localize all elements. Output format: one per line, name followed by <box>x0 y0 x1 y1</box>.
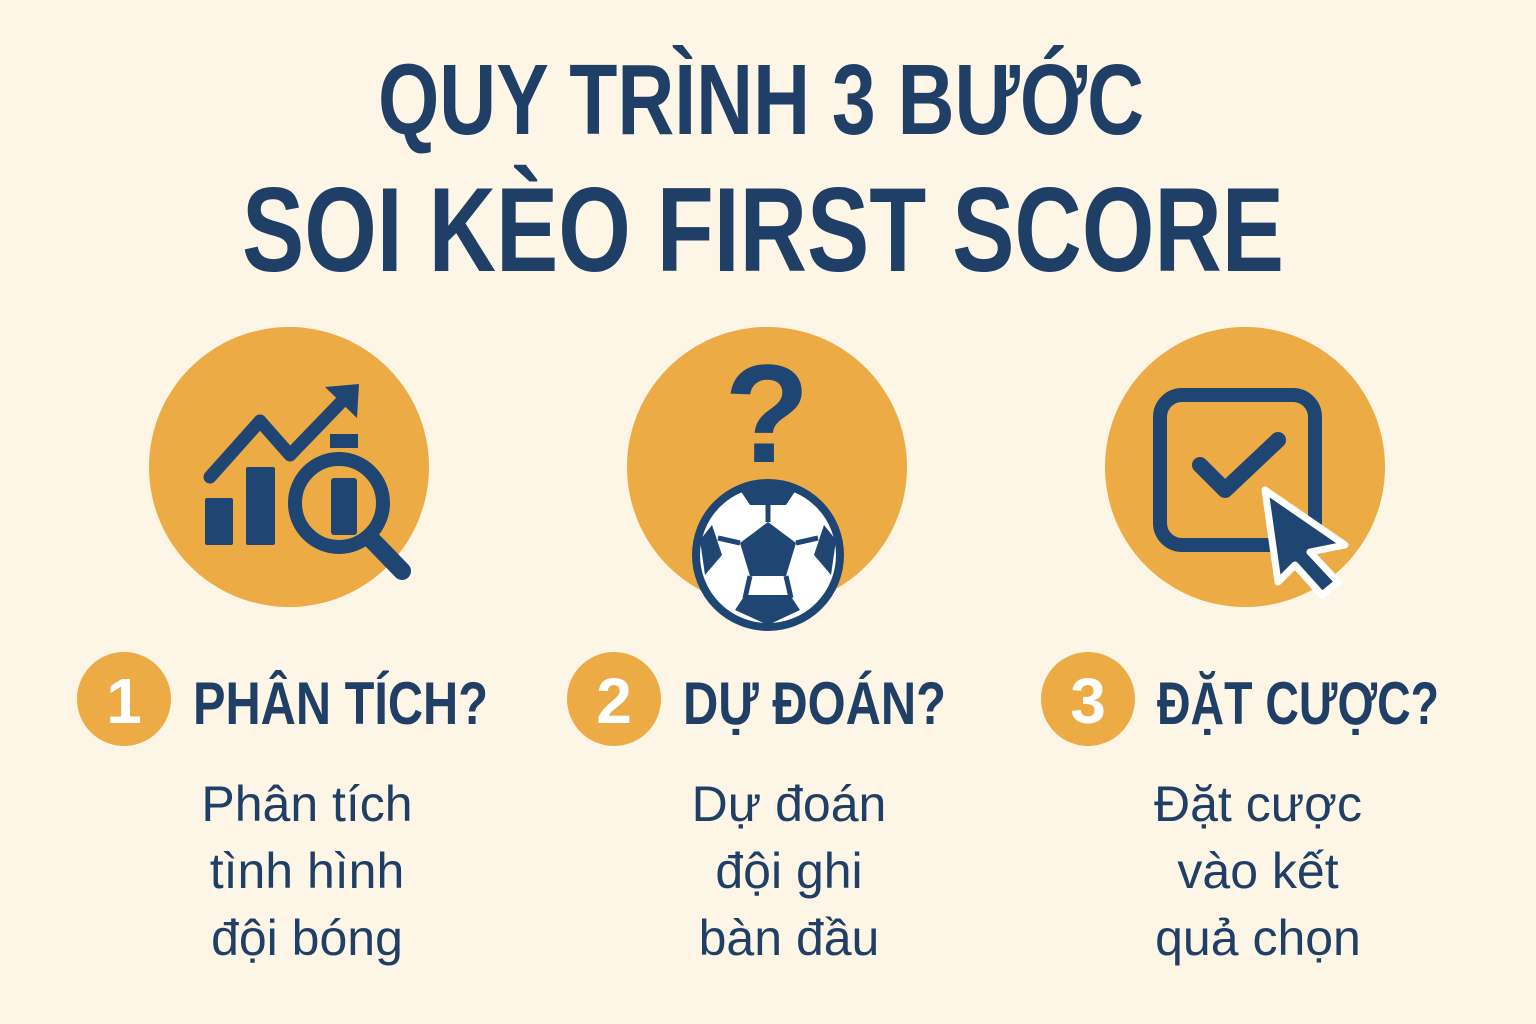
step 1 heading: PHÂN TÍCH? <box>193 670 488 737</box>
step 2 text: bàn đầu <box>699 910 879 966</box>
step 3 text: vào kết <box>1177 843 1339 899</box>
step 3 text: quả chọn <box>1155 910 1361 966</box>
step 3 text <box>1154 776 1362 966</box>
step 3 text: Đặt cược <box>1154 776 1362 832</box>
step 1 text: tình hình <box>210 843 404 899</box>
icon: analysis chart <box>149 327 429 607</box>
step 1 heading <box>77 652 488 746</box>
step 3 heading: ĐẶT CƯỢC? <box>1157 670 1439 737</box>
icon: checkbox and cursor <box>1105 327 1385 607</box>
step 2 text: Dự đoán <box>692 776 886 832</box>
step 2 text: đội ghi <box>715 843 863 899</box>
step 2 text <box>692 776 886 966</box>
step 1 heading: 1 <box>106 665 142 737</box>
step 2 heading: 2 <box>596 665 632 737</box>
step 1 text: đội bóng <box>211 910 403 966</box>
step 1 text <box>201 776 413 966</box>
step 1 text: Phân tích <box>201 776 413 832</box>
title <box>242 44 1284 297</box>
icon: question and ball <box>627 327 907 627</box>
title: QUY TRÌNH 3 BƯỚC <box>378 44 1144 156</box>
step 3 heading: 3 <box>1070 665 1106 737</box>
step 2 heading: DỰ ĐOÁN? <box>683 670 946 737</box>
icon: question and ball: ? <box>724 335 810 492</box>
step 3 heading <box>1041 652 1439 746</box>
step 2 heading <box>567 652 946 746</box>
